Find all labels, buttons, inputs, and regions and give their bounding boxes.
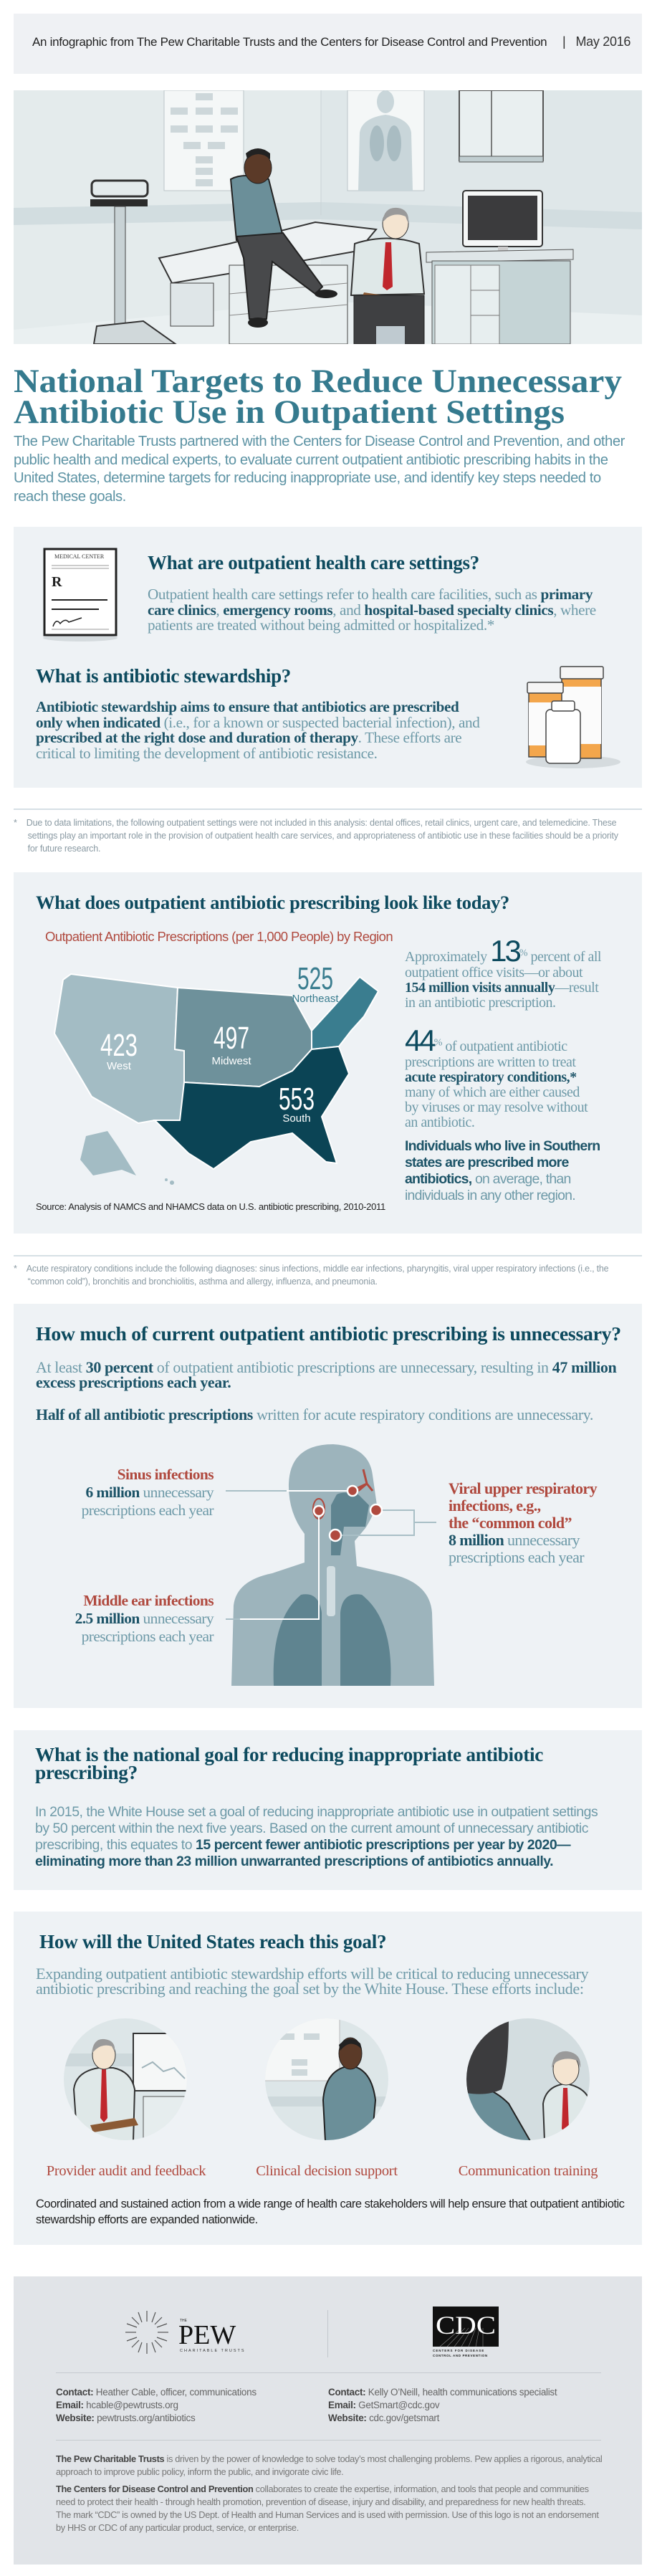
flowchart poster bbox=[164, 90, 244, 191]
chart title: Outpatient Antibiotic Prescriptions (per 1,000 People) by Region bbox=[45, 929, 393, 944]
panel: unnecessary prescribing bbox=[14, 1304, 642, 1708]
text: goal: prescribing, this equates to 15 percent fewer antibiotic prescriptions per year by 2020— bbox=[35, 1837, 570, 1853]
label: audit: Provider audit and feedback bbox=[47, 2163, 206, 2179]
text: stewardship definition: only when indicated (i.e., for a known or suspected bacterial infection), and bbox=[36, 714, 479, 731]
text: goal: In 2015, the White House set a goal of reducing inappropriate antibiotic use in outpatient settings bbox=[35, 1804, 598, 1820]
text: outpatient definition: Outpatient health care settings refer to health care facilities, such as primary bbox=[148, 586, 593, 603]
scale bbox=[90, 181, 176, 344]
logo: Pew: THE bbox=[180, 2319, 188, 2323]
icon: prescription pad bbox=[43, 548, 118, 641]
text: 30 percent bbox=[36, 1358, 616, 1391]
stat: 44 percent: by viruses or may resolve without bbox=[405, 1099, 588, 1115]
callout: viral URI: 8 million unnecessary bbox=[449, 1531, 580, 1549]
stat: 44 percent: prescriptions are written to treat bbox=[405, 1054, 575, 1070]
desk and monitor bbox=[426, 191, 573, 344]
callout: viral URI: the “common cold” bbox=[449, 1514, 572, 1532]
text: for future research. bbox=[28, 844, 100, 854]
contacts: Pew: Website: pewtrusts.org/antibiotics bbox=[56, 2413, 195, 2423]
map chart: South bbox=[282, 1112, 311, 1125]
panel: how to reach goal bbox=[14, 1912, 642, 2245]
text: outpatient definition bbox=[148, 586, 596, 634]
intro paragraph: United States, determine targets for reducing inappropriate use, and identify key steps needed to bbox=[14, 470, 601, 486]
text: coordinated action: Coordinated and sustained action from a wide range of health care stakeholders will help ensure that outpatient antibiotic bbox=[36, 2198, 624, 2210]
contacts: Pew bbox=[56, 2387, 257, 2423]
logo: CDC: CONTROL AND PREVENTION bbox=[433, 2354, 488, 2357]
body diagram bbox=[226, 1444, 436, 1686]
label: communication: Communication training bbox=[459, 2163, 598, 2179]
callout: sinus: prescriptions each year bbox=[82, 1502, 214, 1519]
contacts: Pew: Contact: Heather Cable, officer, communications bbox=[56, 2387, 257, 2398]
about text: The Pew Charitable Trusts is driven by the power of knowledge to solve today’s most challenging problems. Pew applies a rigorous, analytical bbox=[56, 2453, 602, 2464]
stat: 44 percent: an antibiotic. bbox=[405, 1115, 474, 1130]
callout: middle ear bbox=[75, 1592, 214, 1645]
about text bbox=[56, 2453, 602, 2533]
text: southern states: individuals in any other region. bbox=[405, 1188, 575, 1203]
doctor bbox=[351, 208, 424, 344]
text: goal bbox=[35, 1804, 598, 1869]
heading: What is the national goal for reducing inappropriate antibiotic bbox=[35, 1744, 543, 1765]
logo: Pew: CHARITABLE TRUSTS bbox=[180, 2349, 246, 2353]
logo: Pew: PEW bbox=[178, 2320, 236, 2350]
source: Source: Analysis of NAMCS and NHAMCS data on U.S. antibiotic prescribing, 2010-2011 bbox=[36, 1201, 385, 1212]
about text: approach to improve public policy, inform the public, and invigorate civic life. bbox=[56, 2466, 343, 2477]
stat: 13 percent: in an antibiotic prescription. bbox=[405, 995, 556, 1011]
text: intro bbox=[36, 1965, 589, 1998]
contacts: Pew: Email: hcable@pewtrusts.org bbox=[56, 2400, 178, 2410]
contacts: CDC: Contact: Kelly O’Neill, health communications specialist bbox=[328, 2387, 557, 2398]
text: 30 percent: excess prescriptions each year. bbox=[36, 1373, 231, 1391]
patient bbox=[231, 148, 337, 328]
intro paragraph: The Pew Charitable Trusts partnered with the Centers for Disease Control and Prevention, and other bbox=[14, 434, 625, 449]
lung poster bbox=[347, 90, 424, 191]
callout: viral URI: prescriptions each year bbox=[449, 1548, 584, 1566]
icon: communication training bbox=[466, 2018, 590, 2140]
heading bbox=[35, 1744, 543, 1783]
intro paragraph: reach these goals. bbox=[14, 489, 126, 505]
callout: middle ear: Middle ear infections bbox=[83, 1592, 214, 1609]
icon: clinical decision support bbox=[265, 2020, 388, 2140]
footer panel bbox=[14, 2276, 642, 2565]
about text: The Centers for Disease Control and Prevention collaborates to create the expertise, information, and tools that people and communities bbox=[56, 2484, 589, 2494]
title bbox=[14, 363, 623, 430]
header text: An infographic from The Pew Charitable Trusts and the Centers for Disease Control and Prevention bbox=[32, 35, 547, 49]
stat: 44 percent bbox=[405, 1024, 588, 1130]
callout lines bbox=[226, 1491, 436, 1619]
text: * Acute respiratory conditions include the following diagnoses: sinus infections, middle ear infections, pharyngitis, viral upper respiratory infections (i.e., the bbox=[14, 1264, 608, 1274]
heading: prescribing? bbox=[35, 1762, 138, 1783]
about text: need to protect their health - through health promotion, prevention of disease, injury and disability, and preparedness for new health threats. bbox=[56, 2496, 585, 2507]
cabinet bbox=[459, 90, 543, 162]
map chart: 553 bbox=[279, 1082, 315, 1117]
text: southern states: antibiotics, on average, than bbox=[405, 1171, 571, 1187]
contacts: CDC: Website: cdc.gov/getsmart bbox=[328, 2413, 439, 2423]
text: coordinated action: stewardship efforts are expanded nationwide. bbox=[36, 2213, 258, 2226]
stat: 13 percent bbox=[405, 934, 602, 1011]
callout: middle ear: 2.5 million unnecessary bbox=[75, 1610, 214, 1627]
logo: CDC: CENTERS FOR DISEASE bbox=[433, 2349, 484, 2352]
text: stewardship definition: Antibiotic stewardship aims to ensure that antibiotics are prescribed bbox=[36, 698, 459, 715]
text: outpatient definition: care clinics, emergency rooms, and hospital-based specialty clinics, where bbox=[148, 601, 596, 618]
title: Antibiotic Use in Outpatient Settings bbox=[14, 393, 565, 430]
text: southern states bbox=[405, 1138, 600, 1203]
hero illustration: exam room bbox=[14, 90, 642, 344]
date: | May 2016 bbox=[562, 34, 631, 49]
callout: viral URI: Viral upper respiratory bbox=[449, 1479, 597, 1497]
heading: outpatient settings: What are outpatient health care settings? bbox=[148, 552, 479, 573]
heading: How will the United States reach this goal? bbox=[39, 1931, 386, 1952]
panel: national goal bbox=[14, 1730, 642, 1890]
text: * Due to data limitations, the following outpatient settings were not included in this analysis: dental offices, retail clinics, urgent care, and telemedicine. These bbox=[14, 818, 616, 828]
text: 30 percent: At least 30 percent of outpatient antibiotic prescriptions are unnecessary, resulting in 47 million bbox=[36, 1358, 616, 1376]
about text: by HHS or CDC of any particular product, service, or enterprise. bbox=[56, 2522, 299, 2533]
map chart: West bbox=[107, 1060, 132, 1072]
text: stewardship definition: prescribed at the right dose and duration of therapy. These efforts are bbox=[36, 729, 461, 746]
heading: How much of current outpatient antibiotic prescribing is unnecessary? bbox=[36, 1323, 621, 1345]
text: intro: antibiotic prescribing and reaching the goal set by the White House. These efforts include: bbox=[36, 1980, 584, 1998]
text: settings play an important role in the provision of outpatient health care services, and appropriateness of antibiotic use in these facilities should be a priority bbox=[28, 831, 618, 841]
text: half: Half of all antibiotic prescriptions written for acute respiratory conditions are unnecessary. bbox=[36, 1406, 593, 1423]
map chart: 497 bbox=[214, 1021, 249, 1056]
stat: 13 percent: 154 million visits annually—result bbox=[405, 980, 598, 996]
stat: 44 percent: many of which are either caused bbox=[405, 1084, 580, 1100]
callout: sinus: Sinus infections bbox=[118, 1466, 214, 1483]
heading: stewardship: What is antibiotic stewardship? bbox=[36, 665, 291, 687]
text: stewardship definition: critical to limiting the development of antibiotic resistance. bbox=[36, 744, 377, 761]
icon: audit and feedback bbox=[64, 2018, 186, 2140]
data labels: 525 bbox=[297, 961, 333, 996]
intro paragraph: public health and medical experts, to evaluate current outpatient antibiotic prescribing habits in the bbox=[14, 452, 608, 467]
contacts: CDC bbox=[328, 2387, 557, 2423]
text: outpatient definition: patients are treated without being admitted or hospitalized.* bbox=[148, 616, 494, 634]
logo: Pew bbox=[125, 2311, 246, 2354]
callout: sinus: 6 million unnecessary bbox=[86, 1484, 214, 1501]
stat: 13 percent: outpatient office visits—or about bbox=[405, 965, 583, 981]
callout: middle ear: prescriptions each year bbox=[82, 1628, 214, 1645]
text: goal: eliminating more than 23 million unwarranted prescriptions of antibiotics annually. bbox=[35, 1854, 553, 1869]
text: southern states: Individuals who live in Southern bbox=[405, 1138, 600, 1154]
text: intro: Expanding outpatient antibiotic stewardship efforts will be critical to reducing unnecessary bbox=[36, 1965, 588, 1983]
panel: prescribing today bbox=[14, 872, 642, 1234]
header band bbox=[14, 14, 642, 74]
text: coordinated action bbox=[36, 2198, 625, 2226]
label: decision support: Clinical decision support bbox=[256, 2163, 398, 2179]
callout: viral URI bbox=[449, 1479, 598, 1566]
callout: viral URI: infections, e.g., bbox=[449, 1497, 541, 1514]
text: goal: by 50 percent within the next five years. Based on the current amount of unnecessary antibiotic bbox=[35, 1821, 588, 1836]
intro paragraph bbox=[14, 434, 625, 505]
map chart bbox=[54, 961, 379, 1185]
callout: sinus bbox=[82, 1466, 214, 1519]
title: National Targets to Reduce Unnecessary bbox=[14, 363, 623, 400]
text: stewardship definition bbox=[36, 698, 480, 761]
footnote 1 bbox=[14, 808, 642, 810]
icon: prescription pad: MEDICAL CENTER bbox=[54, 553, 105, 560]
logo: CDC: CDC bbox=[436, 2311, 496, 2339]
exam table bbox=[159, 222, 376, 344]
map chart: 423 bbox=[100, 1028, 138, 1063]
footnote 2 bbox=[14, 1255, 642, 1256]
text: southern states: states are prescribed more bbox=[405, 1155, 569, 1170]
heading: What does outpatient antibiotic prescribing look like today? bbox=[36, 892, 509, 913]
about text: The mark “CDC” is owned by the US Dept. of Health and Human Services and is used with permission. Use of this logo is not an endorsement bbox=[56, 2509, 599, 2520]
panel: definitions bbox=[14, 527, 642, 788]
icon: pill bottles bbox=[526, 666, 620, 768]
stat: 44 percent: 44% of outpatient antibiotic bbox=[405, 1024, 567, 1057]
icon: prescription pad: R bbox=[52, 574, 62, 590]
logo: CDC bbox=[433, 2307, 499, 2357]
map chart: Midwest bbox=[211, 1055, 251, 1067]
text: “common cold”), bronchitis and bronchiolitis, asthma and allergy, influenza, and pneumonia. bbox=[28, 1277, 378, 1287]
contacts: CDC: Email: GetSmart@cdc.gov bbox=[328, 2400, 439, 2410]
stat: 13 percent: Approximately 13% percent of all bbox=[405, 934, 601, 968]
stat: 44 percent: acute respiratory conditions,* bbox=[405, 1069, 577, 1085]
map chart: Northeast bbox=[292, 993, 339, 1005]
